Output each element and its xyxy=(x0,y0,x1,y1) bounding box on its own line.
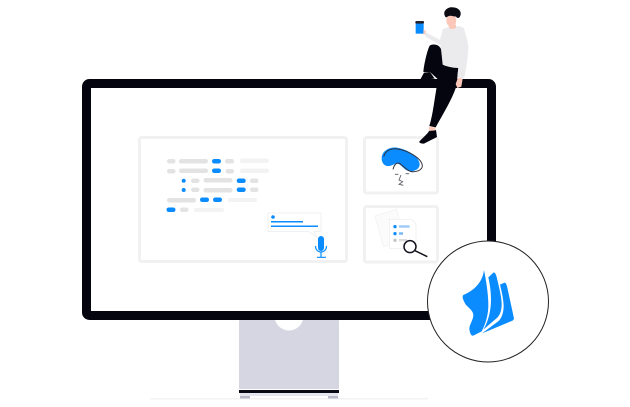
hand xyxy=(456,78,463,88)
ankle xyxy=(429,127,435,131)
monitor stand xyxy=(239,302,339,398)
person xyxy=(415,7,468,144)
panel: speech to text xyxy=(140,138,346,262)
monitor frame xyxy=(86,84,492,316)
panel: document search xyxy=(364,206,438,262)
torso xyxy=(425,26,468,78)
shoe xyxy=(419,130,437,144)
floor line xyxy=(150,398,428,400)
panel: brain xyxy=(364,138,438,193)
text rows xyxy=(166,158,269,212)
badge circle xyxy=(428,241,548,362)
icon: brain and face xyxy=(382,148,422,185)
head xyxy=(444,7,461,29)
coffee cup xyxy=(415,21,424,34)
callout: transcript bubble xyxy=(268,213,321,238)
back arm and hand xyxy=(423,30,426,35)
icon: documents with magnifier xyxy=(375,209,427,257)
icon: blue logo xyxy=(463,270,514,336)
legs xyxy=(420,45,458,127)
icon: microphone xyxy=(316,236,326,257)
